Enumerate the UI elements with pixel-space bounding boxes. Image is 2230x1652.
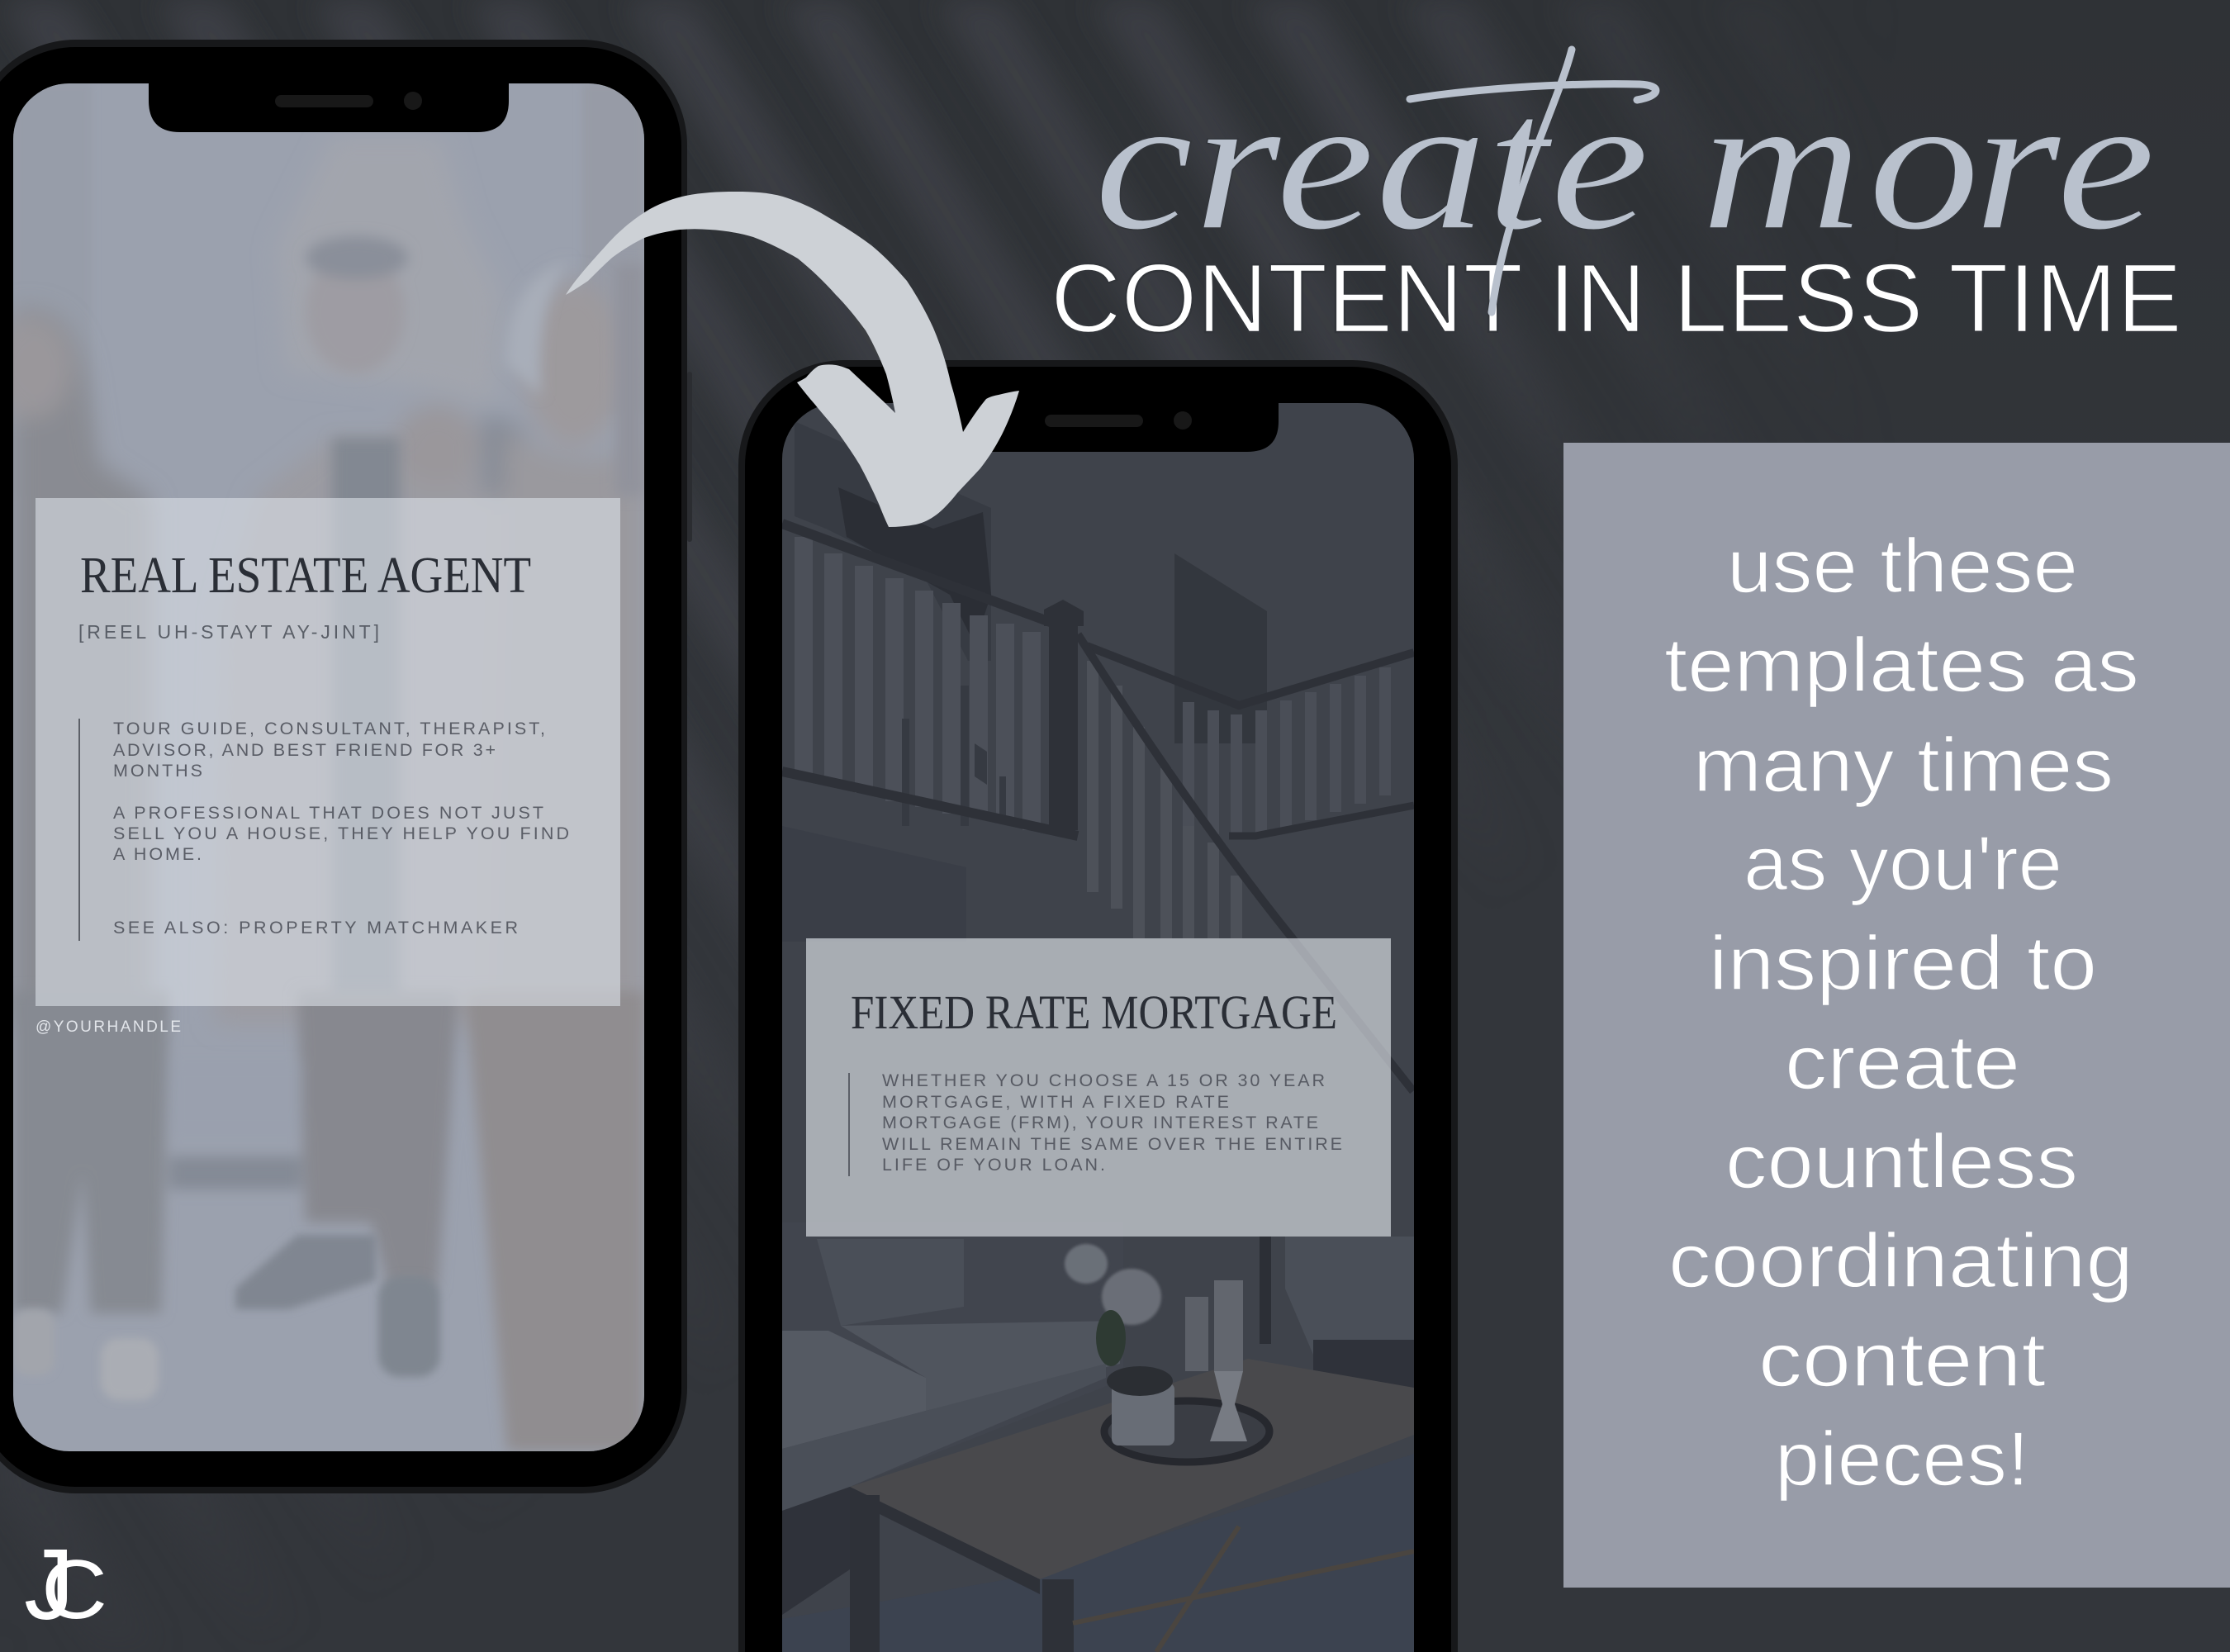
definition text: MORTGAGE, WITH A FIXED RATE	[882, 1092, 1229, 1112]
phone right	[738, 360, 1458, 1652]
child	[277, 136, 502, 406]
table decor	[1104, 1401, 1269, 1462]
definition text: A PROFESSIONAL THAT DOES NOT JUST	[113, 803, 543, 823]
panel text: pieces!	[1775, 1416, 2029, 1502]
definition text: WILL REMAIN THE SAME OVER THE ENTIRE	[882, 1134, 1342, 1154]
phone left notch	[149, 83, 509, 132]
definition text: WHETHER YOU CHOOSE A 15 OR 30 YEAR	[882, 1070, 1325, 1090]
definition text: LIFE OF YOUR LOAN.	[882, 1155, 1105, 1175]
sofa	[782, 1222, 1123, 1615]
panel text: inspired to	[1709, 920, 2097, 1006]
handle: @YOURHANDLE	[36, 1018, 181, 1036]
phone right screen photo: staircase and living room	[782, 403, 1414, 1652]
phone right body	[738, 360, 1458, 1652]
panel text: coordinating	[1668, 1218, 2133, 1303]
panel text: use these	[1727, 523, 2078, 609]
phone left body	[0, 40, 687, 1493]
script words: create more	[1094, 55, 2156, 270]
phone right camera	[1174, 411, 1192, 430]
divider	[848, 1073, 850, 1176]
phone left speaker	[275, 95, 373, 107]
phone right notch	[918, 403, 1279, 452]
panel text: create	[1785, 1019, 2020, 1105]
rug	[782, 1454, 1414, 1652]
woman right	[497, 434, 644, 990]
heading: create more script	[1094, 50, 2156, 312]
divider	[78, 719, 80, 941]
phone left	[0, 40, 692, 1493]
definition text: SEE ALSO: PROPERTY MATCHMAKER	[113, 918, 518, 938]
logo: JC	[24, 1528, 107, 1640]
panel background	[1563, 443, 2230, 1588]
panel text: as you're	[1744, 820, 2062, 906]
arrow	[566, 192, 1019, 527]
definition text: MONTHS	[113, 761, 202, 781]
card panel	[36, 498, 620, 1006]
long t flourish	[1410, 50, 1656, 312]
panel text: many times	[1693, 722, 2114, 808]
stair balusters	[1087, 661, 1242, 938]
definition text: SELL YOU A HOUSE, THEY HELP YOU FIND	[113, 824, 569, 843]
definition text: TOUR GUIDE, CONSULTANT, THERAPIST,	[113, 719, 545, 738]
phone left camera	[404, 92, 422, 110]
doorway	[1174, 553, 1267, 743]
definition text	[113, 719, 569, 938]
wall art	[795, 421, 991, 661]
rails	[782, 524, 1414, 1091]
card: real estate agent	[36, 498, 620, 1006]
table	[850, 1359, 1414, 1579]
panel: use these templates	[1563, 443, 2230, 1588]
chair right	[1285, 1237, 1414, 1355]
card heading: REAL ESTATE AGENT	[80, 548, 531, 604]
phone left screen photo: family	[0, 83, 644, 1451]
card heading: FIXED RATE MORTGAGE	[851, 985, 1337, 1039]
panel text: content	[1758, 1317, 2046, 1403]
definition text	[882, 1070, 1342, 1175]
man jacket	[215, 438, 537, 1024]
phone left side button	[687, 372, 692, 542]
card: fixed rate mortgage	[806, 938, 1391, 1237]
newel post	[1044, 600, 1084, 830]
card panel	[806, 938, 1391, 1237]
panel text: countless	[1725, 1118, 2078, 1204]
woman left	[13, 308, 152, 1024]
logo: JC: J	[24, 1528, 74, 1640]
phone right speaker	[1045, 415, 1143, 427]
definition text: MORTGAGE (FRM), YOUR INTEREST RATE	[882, 1113, 1318, 1132]
panel text	[1664, 523, 2139, 1502]
lower wall panel	[782, 826, 966, 942]
pronunciation: [REEL UH-STAYT AY-JINT]	[78, 621, 379, 643]
definition text: ADVISOR, AND BEST FRIEND FOR 3+	[113, 740, 496, 760]
definition text: A HOME.	[113, 844, 202, 864]
background	[31, 13, 1460, 838]
heading: content in less time: CONTENT IN LESS TIME	[1051, 244, 2182, 354]
balusters upper left	[795, 537, 1041, 830]
panel text: templates as	[1664, 622, 2139, 708]
logo: JC: C	[41, 1544, 107, 1636]
